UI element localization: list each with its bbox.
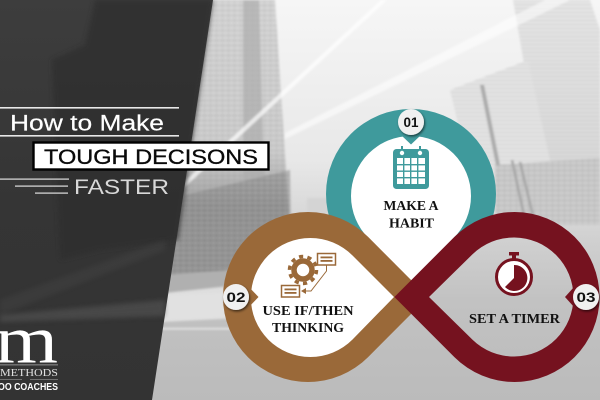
icon: stopwatch xyxy=(496,252,532,294)
badge: 03: 03 xyxy=(576,289,596,305)
icon: gear with decision boxes xyxy=(282,254,336,297)
panel: make a habit xyxy=(326,109,496,314)
panel: use if/then thinking xyxy=(223,212,428,382)
panel: set a timer xyxy=(394,212,600,382)
label: make a habit xyxy=(384,199,439,232)
heading: how to make: How to Make xyxy=(10,110,164,136)
title block xyxy=(0,107,268,199)
logo xyxy=(0,302,58,393)
badge: 01: 01 xyxy=(404,114,419,130)
icon: calendar xyxy=(393,146,429,189)
badge: 03 xyxy=(573,284,599,310)
heading box: tough decisons: TOUGH DECISONS xyxy=(44,145,258,169)
badge: 02 xyxy=(223,284,249,310)
badge: 01 xyxy=(398,109,424,135)
logo: METHODS xyxy=(0,368,58,379)
badge: 02: 02 xyxy=(226,289,246,305)
infinity diagram xyxy=(223,109,600,382)
dark left panel xyxy=(0,0,213,400)
label: use if/then thinking: USE IF/THEN xyxy=(262,304,354,319)
logo: OO COACHES xyxy=(0,382,58,393)
heading: faster with speed lines: FASTER xyxy=(74,175,169,199)
label: make a habit: HABIT xyxy=(389,216,435,232)
label: use if/then thinking: THINKING xyxy=(272,321,344,336)
label: make a habit: MAKE A xyxy=(384,199,439,214)
label: set a timer: SET A TIMER xyxy=(469,312,561,327)
label: use if/then thinking xyxy=(262,304,354,336)
